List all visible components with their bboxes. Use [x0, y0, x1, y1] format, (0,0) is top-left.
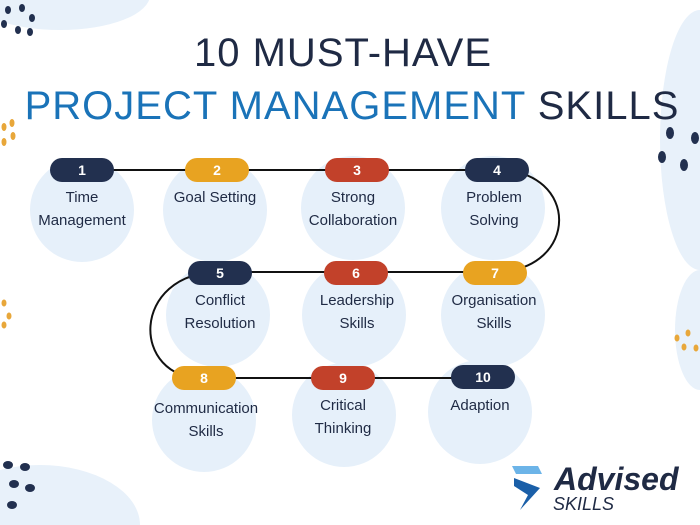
labels: Skills — [188, 423, 224, 440]
pills: 8 — [200, 370, 208, 386]
labels: Goal Setting — [174, 189, 256, 206]
labels: Skills — [339, 315, 375, 332]
title: PROJECT MANAGEMENT SKILLS — [25, 84, 679, 128]
labels: Management — [38, 212, 127, 229]
logo: Advised — [553, 461, 680, 497]
labels: Resolution — [185, 315, 255, 332]
labels: Time — [66, 189, 98, 206]
title: 10 MUST-HAVE — [194, 31, 492, 75]
labels: Thinking — [315, 420, 371, 437]
pills: 1 — [78, 162, 86, 178]
logo: SKILLS — [553, 494, 614, 514]
pills: 5 — [216, 265, 224, 281]
pills: 9 — [339, 370, 347, 386]
labels: Communication — [154, 400, 258, 417]
labels: Conflict — [195, 292, 246, 309]
labels — [38, 189, 537, 440]
labels: Organisation — [451, 292, 537, 309]
labels: Problem — [466, 189, 522, 206]
labels: Leadership — [320, 292, 394, 309]
pills — [50, 158, 529, 390]
labels: Adaption — [450, 397, 510, 414]
logo — [512, 461, 680, 514]
pills: 10 — [475, 369, 491, 385]
title — [25, 31, 679, 128]
labels: Collaboration — [309, 212, 397, 229]
circles — [30, 156, 545, 472]
labels: Solving — [469, 212, 519, 229]
pills: 3 — [353, 162, 361, 178]
pills: 6 — [352, 265, 360, 281]
labels: Strong — [331, 189, 375, 206]
pills: 2 — [213, 162, 221, 178]
labels: Skills — [476, 315, 512, 332]
connecting path — [82, 170, 559, 378]
pills: 4 — [493, 162, 501, 178]
labels: Critical — [320, 397, 366, 414]
pills: 7 — [491, 265, 499, 281]
